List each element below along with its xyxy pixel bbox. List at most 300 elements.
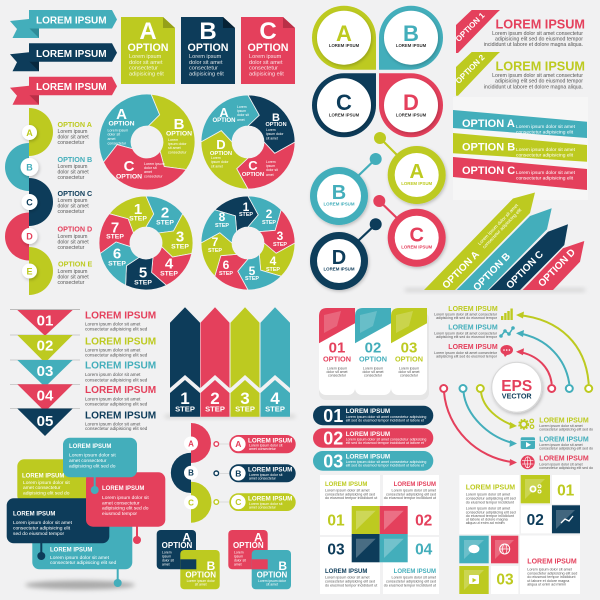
- panel: interlocking option blocks navy-green: [157, 530, 220, 589]
- tag block: option 1: incididunt ut labore et dolore magna aliqua.: [484, 42, 583, 48]
- card: option B: [181, 17, 235, 84]
- arrow: option D: [523, 241, 584, 290]
- number 01: 01: [557, 483, 575, 500]
- band: option C: Lorem ipsum dolor sit amet: [516, 170, 576, 176]
- step 2: STEP: [205, 404, 225, 414]
- box: red: Lorem ipsum dolor sit: [102, 495, 149, 501]
- block 03: consectetur adipisicing elit sed: [325, 580, 375, 584]
- chart: 4-option cycle: dolor sit: [266, 168, 278, 172]
- wave segment B: consectetur: [58, 175, 85, 181]
- text block green: [466, 484, 516, 525]
- band: option B: consectetur adipisicing elit: [516, 152, 574, 158]
- step 2: [200, 307, 230, 417]
- chart: 7-step cycle: STEP: [129, 216, 147, 222]
- chart: 7-step cycle: STEP: [106, 234, 124, 240]
- card 03: Lorem ipsum: [399, 366, 419, 370]
- step 1: STEP: [175, 404, 195, 414]
- number 02: 02: [527, 512, 544, 529]
- chart: 7-step cycle: 2: [161, 204, 169, 222]
- item 05: consectetur adipisicing elit sed: [85, 426, 148, 431]
- block 03: [325, 542, 377, 588]
- item 02: consectetur adipisicing elit sed: [85, 353, 148, 358]
- chart: 3-option cycle: Lorem ipsum: [144, 162, 165, 166]
- step 1: 1: [180, 389, 190, 408]
- panel: numbered triangles list: [10, 309, 156, 436]
- box: navy: consectetur adipisicing elit: [13, 525, 71, 531]
- card 01: 01: [329, 340, 345, 356]
- panel: interlocking option blocks navy-green: B: [207, 559, 216, 573]
- chart: 3-option cycle: A: [116, 106, 127, 123]
- label: line chart: [434, 324, 498, 339]
- row A: Lorem ipsum dolor sit: [249, 444, 282, 448]
- wave segment A: Lorem ipsum: [58, 129, 87, 135]
- panel: interlocking option blocks red-teal: Lorem ipsum dolor: [258, 579, 287, 583]
- text block green: LOREM IPSUM: [466, 484, 515, 492]
- box: navy: LOREM IPSUM: [13, 512, 55, 518]
- box: navy: sed do eiusmod tempor: [13, 531, 64, 537]
- card: option A: consectetur: [129, 66, 158, 72]
- label: globe: consectetur adipisicing elit sed do: [539, 466, 593, 470]
- block 01: LOREM IPSUM: [325, 482, 367, 488]
- item 03: Lorem ipsum dolor sit amet: [85, 372, 141, 377]
- tag block: option 2: incididunt ut labore et dolore magna aliqua.: [484, 84, 583, 90]
- chart: 3-option cycle: Lorem ipsum: [108, 128, 128, 132]
- chart: 7-step cycle: STEP: [134, 280, 152, 286]
- tag block: option 1: Lorem ipsum dolor sit amet consectetur: [492, 31, 583, 37]
- card 03: [391, 308, 427, 395]
- panel: wavy options list: [5, 108, 93, 295]
- chart: 4-option cycle: Lorem: [237, 105, 247, 109]
- chart: 8-step cycle: 8: [219, 210, 226, 224]
- chart: 4-option cycle: A: [219, 105, 229, 120]
- box: red: adipisicing elit sed do: [102, 506, 149, 512]
- item 04: [17, 384, 156, 412]
- arrow: option A: OPTION A: [441, 249, 482, 291]
- panel: interlocking option blocks red-teal: OPTION: [257, 570, 288, 580]
- card 01: Lorem ipsum: [327, 366, 347, 370]
- icon: gears: [519, 419, 534, 429]
- chart: 3-option cycle: dolor sit: [144, 166, 157, 170]
- block 03: do eiusmod tempor incididunt ut: [325, 584, 377, 588]
- chart: 4-option cycle: Lorem: [211, 156, 221, 160]
- wave segment A: A: [26, 128, 33, 138]
- wave segment B: OPTION B: [58, 155, 92, 164]
- wave segment D: Lorem ipsum: [58, 234, 87, 240]
- row A: LOREM IPSUM: [248, 437, 292, 444]
- block 02: consectetur adipisicing elit sed: [386, 492, 436, 496]
- row A: A: [235, 439, 241, 449]
- wave segment A: [22, 108, 92, 156]
- chart: 3-option cycle: OPTION: [108, 120, 135, 128]
- block 04: [384, 542, 436, 588]
- wave segment C: OPTION C: [58, 189, 92, 198]
- card: option B: Lorem ipsum: [189, 54, 222, 60]
- tag block: option 2: adipisicing elit sed do eiusmod tempor: [495, 78, 583, 84]
- petal A: LOREM IPSUM: [329, 43, 360, 48]
- step 4: [260, 307, 290, 417]
- text block green: aliqua ut enim ad minim: [466, 521, 505, 525]
- panel: slanted option bands: [453, 97, 588, 200]
- petal D: D: [403, 90, 419, 115]
- item 01: [17, 310, 156, 336]
- arrow: option D: OPTION D: [536, 247, 578, 289]
- box: teal lower: Lorem ipsum dolor sit amet: [50, 555, 110, 561]
- box: teal lower: consectetur adipisicing elit sed: [50, 560, 117, 566]
- item 03: consectetur adipisicing elit sed: [85, 377, 148, 382]
- label: globe: LOREM IPSUM: [539, 456, 589, 463]
- label: chat: LOREM IPSUM: [448, 344, 498, 351]
- item 02: LOREM IPSUM: [85, 336, 156, 347]
- card 03: dolor sit amet: [398, 370, 420, 374]
- item 04: Lorem ipsum dolor sit amet: [85, 396, 141, 401]
- arc: red to chat: [516, 348, 555, 392]
- chart: 4-option cycle: D: [216, 137, 226, 152]
- pill 03: elit sed do eiusmod tempor incididunt ut labore et: [346, 464, 424, 468]
- step 3: STEP: [235, 404, 255, 414]
- chart: 4-option cycle: ipsum dolor: [266, 132, 284, 136]
- label: gears: consectetur adipisicing elit sed do: [539, 428, 593, 432]
- text block red: ut labore et dolore magna: [527, 579, 570, 583]
- ribbon: red: LOREM IPSUM: [36, 82, 107, 93]
- pin C: LOREM IPSUM: [401, 244, 433, 249]
- label: video: Lorem ipsum dolor sit amet: [539, 443, 583, 447]
- icon: bar chart: [501, 308, 513, 320]
- chart: 3-option cycle: consectetur: [168, 150, 187, 154]
- card 01: [319, 308, 355, 395]
- wave segment E: E: [26, 266, 33, 276]
- row C: amet consectetur: [249, 506, 277, 510]
- arrow: option B: [457, 208, 552, 293]
- step 2: 2: [210, 389, 220, 408]
- panel: interlocking option blocks navy-green: A: [182, 530, 191, 544]
- wave segment C: dolor sit amet: [58, 204, 89, 210]
- pin A: [374, 132, 446, 204]
- row C: C: [188, 498, 194, 507]
- card: option C: Lorem ipsum: [249, 54, 282, 60]
- chart: 8-step cycle: 3: [277, 229, 284, 243]
- panel: diagonal arrows: [405, 192, 585, 293]
- label: line chart: Lorem ipsum dolor sit amet consectetur: [434, 332, 498, 336]
- wave segment D: [5, 212, 92, 260]
- step 3: 3: [240, 389, 250, 408]
- chart: 4-option cycle: [201, 95, 295, 189]
- tile: video: [459, 566, 489, 594]
- card: option B: OPTION: [188, 42, 228, 54]
- panel: interlocking option blocks navy-green: OPTION: [185, 570, 216, 580]
- item 05: [17, 408, 156, 436]
- row C: C: [235, 497, 241, 507]
- pill 03: Lorem ipsum dolor sit amet consectetur adipisicing: [346, 460, 426, 464]
- box: green: adipisicing elit sed do: [23, 490, 70, 496]
- box: red: eiusmod tempor: [102, 511, 137, 517]
- chart: 4-option cycle: sit amet: [211, 164, 223, 168]
- text block green: Lorem ipsum dolor sit amet: [466, 492, 510, 496]
- arrow: option A: [424, 192, 535, 291]
- card: option A: adipisicing elit: [129, 72, 164, 78]
- panel: interlocking option blocks red-teal: A: [254, 530, 263, 544]
- item 04: 04: [37, 388, 54, 404]
- card 03: 03: [401, 340, 417, 356]
- chart: 7-step cycle: 1: [134, 201, 142, 218]
- wave segment C: Lorem ipsum: [58, 198, 87, 204]
- chart: 7-step cycle: 4: [165, 256, 174, 272]
- chart: 3-option cycle: B: [174, 116, 185, 133]
- wave segment E: OPTION E: [58, 260, 93, 268]
- label: chat: Lorem ipsum dolor sit amet consectetur: [434, 351, 498, 355]
- card: option A: [121, 17, 175, 84]
- wave segment A: OPTION A: [58, 120, 92, 129]
- block 01: [325, 482, 377, 530]
- box: green: LOREM IPSUM: [22, 474, 64, 480]
- text block red: LOREM IPSUM: [527, 558, 577, 566]
- pill 01: 01: [323, 406, 343, 426]
- card: option A: dolor sit amet: [129, 60, 163, 66]
- card: option A: A: [139, 18, 157, 45]
- band: option C: consectetur adipisicing elit: [516, 175, 574, 181]
- petal C: LOREM IPSUM: [329, 112, 360, 118]
- arrow: option B: OPTION B: [471, 251, 513, 293]
- pill 02: [313, 428, 433, 448]
- chart: 4-option cycle: sit amet: [266, 136, 278, 140]
- pin B: LOREM IPSUM: [324, 202, 355, 207]
- arrow: option A: consectetur adipisicing elit: [481, 207, 523, 249]
- wave segment A: consectetur: [58, 140, 85, 146]
- wave segment C: consectetur: [58, 209, 85, 215]
- panel: interlocking option blocks red-teal: OPTION: [233, 541, 264, 550]
- band: option C: OPTION C: [462, 165, 515, 177]
- chart: 8-step cycle: 7: [212, 235, 219, 249]
- block 04: Lorem ipsum dolor sit amet: [392, 576, 436, 580]
- pin C: [373, 195, 446, 267]
- chart: 8-step cycle: 2: [266, 207, 273, 221]
- pill 03: [313, 451, 433, 472]
- row B: [171, 453, 296, 493]
- block 01: Lorem ipsum dolor sit amet: [325, 488, 369, 492]
- panel: upper arcs with labels: [434, 306, 592, 392]
- panel: interlocking option blocks navy-green: dolor sit: [162, 558, 174, 562]
- tag block: option 1: OPTION 1: [454, 10, 487, 44]
- card: option A: OPTION: [128, 42, 168, 54]
- row B: LOREM IPSUM: [248, 466, 292, 474]
- box: red: LOREM IPSUM: [102, 486, 144, 492]
- chart: 8-step cycle: STEP: [215, 223, 229, 229]
- panel: connected pin circles: [310, 132, 446, 290]
- petal A: [312, 6, 376, 70]
- tag block: option 1: LOREM IPSUM: [495, 18, 585, 32]
- chart: 7-step cycle: 6: [113, 246, 121, 262]
- number 03: 03: [496, 572, 514, 588]
- chart: 4-option cycle: ipsum: [266, 164, 275, 168]
- label: globe: Lorem ipsum dolor sit amet: [539, 462, 583, 466]
- card 02: 02: [365, 340, 381, 356]
- chart: 3-option cycle: C: [124, 158, 135, 175]
- card: option C: [241, 17, 295, 84]
- label: gears: [539, 418, 593, 432]
- chart: 8-step cycle: STEP: [208, 248, 222, 254]
- pin D: LOREM IPSUM: [324, 267, 355, 272]
- item 04: LOREM IPSUM: [85, 385, 156, 396]
- pill 02: elit sed do eiusmod tempor incididunt ut labore et: [346, 441, 424, 445]
- panel: interlocking option blocks red-teal: amet: [234, 562, 242, 566]
- block 02: [384, 482, 436, 530]
- tag block: option 2: LOREM IPSUM: [495, 60, 585, 74]
- block 03: LOREM IPSUM: [325, 569, 367, 575]
- row B: B: [188, 469, 194, 478]
- pill 01: LOREM IPSUM: [346, 408, 390, 415]
- text block red: Lorem ipsum dolor sit amet: [527, 568, 572, 572]
- petal B: B: [403, 21, 419, 46]
- item 01: 01: [37, 312, 53, 330]
- block 03: Lorem ipsum dolor sit amet: [325, 576, 369, 580]
- chart: 4-option cycle: OPTION: [210, 151, 232, 157]
- block 04: consectetur adipisicing elit sed: [386, 580, 436, 584]
- chart: 3-option cycle: consectetur: [144, 174, 163, 178]
- chart: 4-option cycle: OPTION: [265, 122, 287, 128]
- panel: 4-square grid: [320, 475, 439, 594]
- arrow: option C: OPTION C: [504, 249, 546, 291]
- chart: 3-option cycle: amet: [144, 170, 152, 174]
- chart: 8-step cycle: 4: [270, 254, 277, 268]
- arrow: option C: [489, 224, 568, 291]
- block 02: 02: [415, 512, 432, 530]
- pin B: B: [332, 182, 346, 204]
- card: option C: consectetur: [249, 66, 278, 72]
- card 02: consectetur: [364, 374, 383, 378]
- text block red: consectetur adipisicing elit sed: [527, 572, 577, 576]
- tag block: option 1: [454, 10, 585, 53]
- chart: 3-option cycle: ipsum dolor: [168, 142, 187, 146]
- label: gears: Lorem ipsum dolor sit amet: [539, 424, 583, 428]
- tag block: option 1: adipisicing elit sed do eiusmod tempor: [495, 36, 583, 42]
- text block red: aliqua ut enim ad minim: [527, 582, 566, 586]
- item 05: Lorem ipsum dolor sit amet: [85, 422, 141, 427]
- pill 03: 03: [323, 452, 343, 472]
- panel: lower arcs with labels: [440, 385, 593, 470]
- square teal: [380, 534, 408, 562]
- chart: 7-step cycle: 7: [111, 220, 119, 236]
- chart: 7-step cycle: STEP: [160, 270, 178, 278]
- panel: icon tile grid: [459, 475, 580, 594]
- panel: interlocking option blocks red-teal: ipsum: [234, 554, 243, 558]
- chart: 8-step cycle: 5: [249, 264, 256, 278]
- item 04: consectetur adipisicing elit sed: [85, 402, 148, 407]
- card: option C: C: [259, 18, 277, 45]
- item 02: [17, 335, 156, 363]
- tag block: option 2: OPTION 2: [454, 52, 487, 86]
- text block red: [527, 558, 577, 586]
- panel: numbered pills: [313, 406, 433, 472]
- text block green: consectetur adipisicing elit sed: [466, 496, 516, 500]
- panel: interlocking option blocks navy-green: sit amet: [195, 582, 207, 586]
- card: option C: OPTION: [248, 42, 288, 54]
- label: gears: LOREM IPSUM: [539, 418, 589, 425]
- row B: amet consectetur: [249, 476, 277, 480]
- tag block: option 2: Lorem ipsum dolor sit amet consectetur: [492, 73, 583, 79]
- label: line chart: adipisicing elit sed do eiusmod tempor: [436, 335, 498, 339]
- icon: line chart: [499, 326, 515, 338]
- petal B: [379, 6, 443, 70]
- chart: 8-step cycle: STEP: [239, 212, 253, 218]
- wave segment E: Lorem ipsum: [58, 269, 87, 275]
- item 05: 05: [37, 413, 53, 430]
- icon: globe: [521, 455, 535, 469]
- card: option A: Lorem ipsum: [129, 54, 162, 60]
- chart: 4-option cycle: Lorem: [266, 128, 276, 132]
- petal C: C: [336, 90, 352, 115]
- panel: interlocking option blocks red-teal: sit amet: [266, 582, 278, 586]
- panel: half-circle ABC list: [171, 423, 296, 523]
- band: option B: Lorem ipsum dolor sit amet: [516, 147, 576, 153]
- card 02: Lorem ipsum: [363, 366, 383, 370]
- label: bars: LOREM IPSUM: [448, 306, 498, 313]
- pill 01: [313, 406, 433, 426]
- wave segment C: C: [26, 198, 33, 208]
- panel: clover ABCD circles: [312, 6, 443, 137]
- wave segment E: consectetur: [58, 280, 85, 286]
- chart: 8-step cycle: [191, 186, 305, 300]
- row C: LOREM IPSUM: [248, 496, 292, 502]
- row B: B: [235, 468, 241, 478]
- wave segment B: [5, 143, 92, 191]
- block 04: do eiusmod tempor incididunt ut: [384, 584, 436, 588]
- card 03: OPTION: [395, 354, 423, 363]
- card: option C: dolor sit amet: [249, 60, 283, 66]
- card 02: OPTION: [359, 354, 387, 363]
- panel: interlocking option blocks red-teal: dolor sit: [234, 558, 246, 562]
- chart: 3-option cycle: Lorem: [168, 138, 178, 142]
- box: navy: Lorem ipsum dolor sit amet: [13, 520, 73, 526]
- label: video: consectetur adipisicing elit sed do: [539, 446, 593, 450]
- chart: 3-option cycle: OPTION: [166, 130, 192, 138]
- box: teal upper: [63, 438, 137, 494]
- wave segment B: dolor sit amet: [58, 170, 89, 176]
- row A: [184, 423, 296, 463]
- badge: EPS vector: VECTOR: [502, 392, 532, 400]
- pin D: D: [332, 247, 346, 269]
- panel: document option cards: [121, 17, 295, 84]
- chart: 3-option cycle: [83, 88, 199, 209]
- card: option B: adipisicing elit: [189, 72, 224, 78]
- chart: 4-option cycle: amet: [266, 173, 274, 177]
- wave segment C: [22, 178, 92, 226]
- band: option A: OPTION A: [462, 118, 515, 130]
- band: option C: [453, 157, 587, 190]
- chart: 3-option cycle: dolor sit: [108, 132, 120, 136]
- arc: teal to line chart: [516, 330, 573, 392]
- label: bars: adipisicing elit sed do eiusmod tempor: [436, 316, 498, 320]
- block 03: 03: [327, 542, 345, 558]
- wave segment D: dolor sit amet: [58, 240, 89, 246]
- text block green: do eiusmod tempor incididunt: [466, 500, 514, 504]
- chart: 4-option cycle: ipsum dolor: [211, 160, 229, 164]
- petal C: [312, 73, 376, 137]
- petal D: LOREM IPSUM: [396, 112, 427, 118]
- item 03: [17, 360, 156, 387]
- tile: line chart: [552, 505, 580, 533]
- petal A: A: [336, 21, 352, 46]
- panel: corner-tag text blocks: [454, 10, 585, 96]
- card 02: [355, 308, 391, 395]
- arc: teal to video: [460, 385, 517, 447]
- tile: chat: [459, 536, 489, 563]
- chart: 8-step cycle: STEP: [266, 267, 280, 273]
- block 02: LOREM IPSUM: [394, 482, 436, 488]
- panel: interlocking option blocks red-teal: Lorem: [234, 551, 244, 555]
- chart: 7-step cycle: STEP: [108, 260, 126, 268]
- box: teal upper: amet consectetur: [69, 458, 107, 464]
- block 04: LOREM IPSUM: [394, 569, 436, 575]
- pill 01: elit sed do eiusmod tempor incididunt ut labore et: [346, 418, 424, 422]
